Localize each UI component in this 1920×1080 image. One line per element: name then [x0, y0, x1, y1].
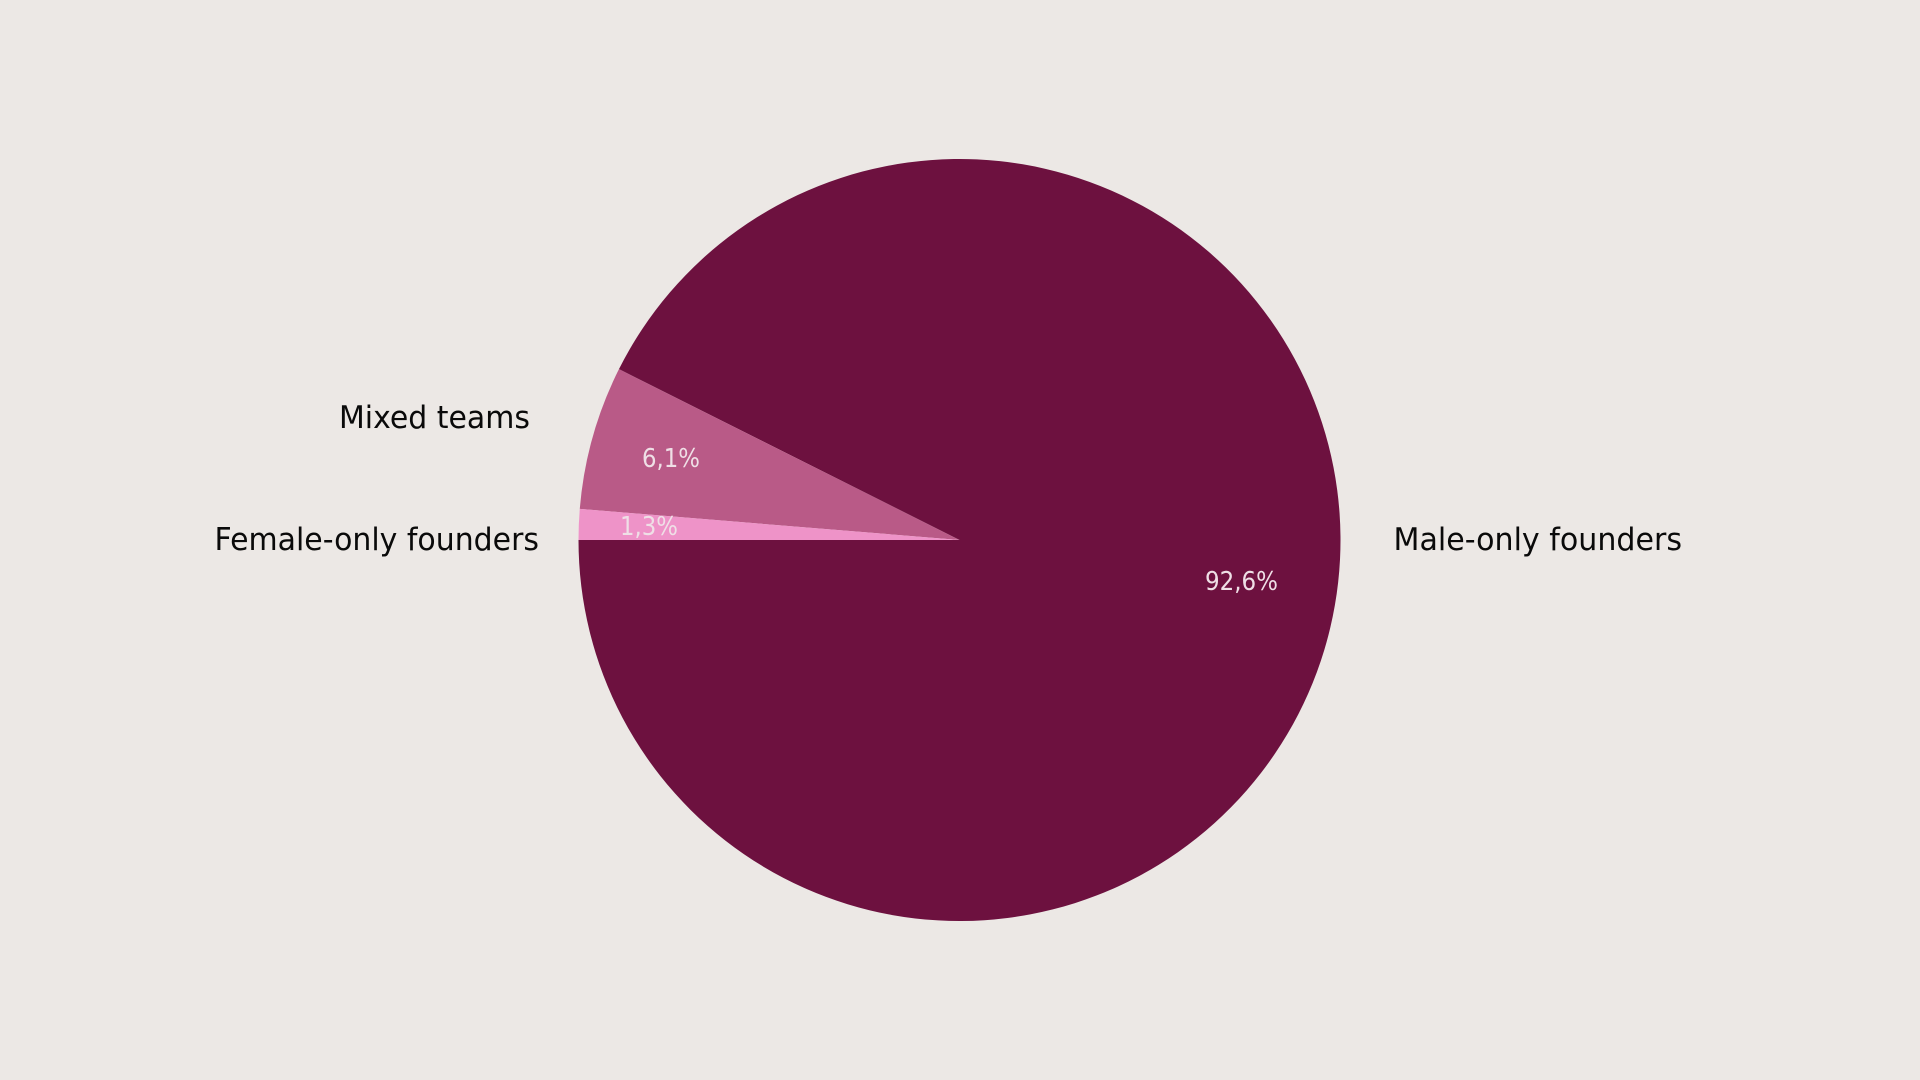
slice: female-only founders 1,3%	[578, 509, 960, 540]
label: Male-only founders: Male-only founders	[1394, 522, 1682, 558]
label: Female-only founders: Female-only founders	[214, 522, 539, 558]
slice: male-only founders 92,6%	[578, 159, 1340, 921]
value: 6,1%: 6,1%	[642, 444, 700, 474]
value: 1,3%: 1,3%	[620, 512, 678, 542]
label: Mixed teams: Mixed teams	[339, 400, 530, 436]
slice: mixed teams 6,1%	[580, 369, 960, 540]
value: 92,6%: 92,6%	[1205, 567, 1278, 597]
